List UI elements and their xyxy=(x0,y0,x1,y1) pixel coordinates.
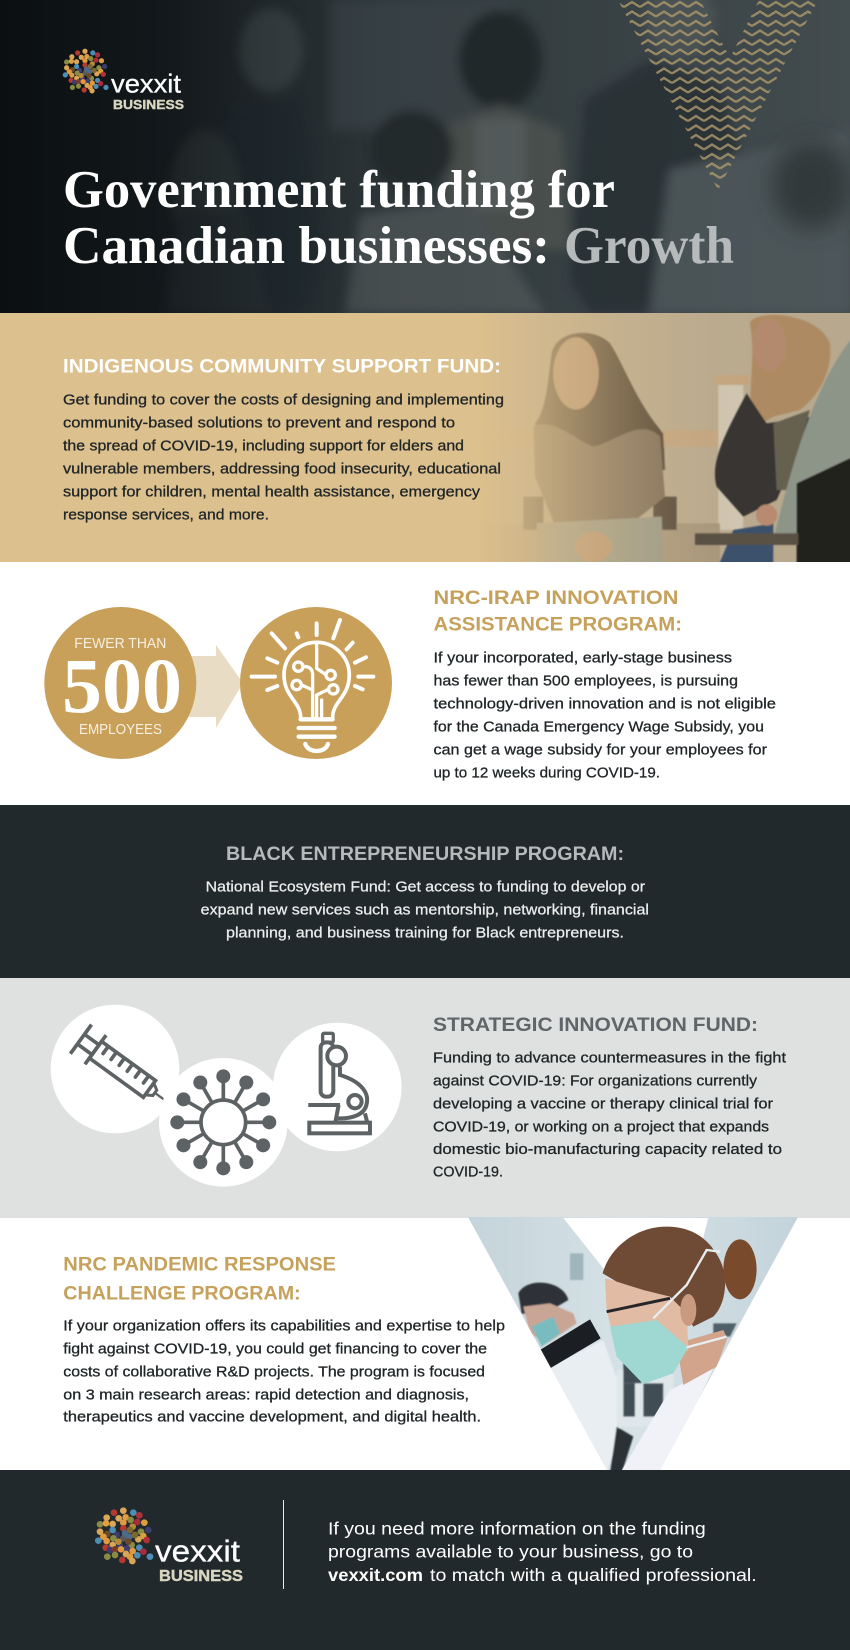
body text: costs of collaborative R&D projects. The program is focused xyxy=(63,1364,485,1381)
body text: domestic bio-manufacturing capacity related to xyxy=(433,1141,782,1158)
body text: community-based solutions to prevent and respond to xyxy=(63,414,455,431)
circle: fewer than 500 employees xyxy=(44,607,196,759)
body text: If your incorporated, early-stage business xyxy=(434,649,732,666)
call to action text: vexxit.com xyxy=(328,1565,423,1585)
call to action text: to match with a qualified professional. xyxy=(430,1565,757,1585)
circle: fewer than 500 employees: 500 xyxy=(62,642,182,729)
panel: footer xyxy=(0,1470,850,1650)
title: Growth xyxy=(564,217,734,275)
body text: COVID-19. xyxy=(433,1164,503,1181)
call to action text: If you need more information on the funding xyxy=(328,1518,706,1538)
body text: COVID-19, or working on a project that expands xyxy=(433,1118,769,1135)
panel: NRC pandemic response challenge program xyxy=(63,1217,798,1470)
heading: BLACK ENTREPRENEURSHIP PROGRAM: xyxy=(226,843,624,865)
body text: fight against COVID-19, you could get financing to cover the xyxy=(63,1341,487,1358)
logo: vexxit business xyxy=(95,1507,243,1585)
call to action text xyxy=(328,1518,757,1585)
heading: ASSISTANCE PROGRAM: xyxy=(434,614,682,636)
circle: fewer than 500 employees: FEWER THAN xyxy=(74,635,166,652)
icon circle: microscope xyxy=(273,1023,402,1151)
panel: strategic innovation fund xyxy=(0,978,850,1218)
logo: vexxit business: BUSINESS xyxy=(113,98,184,112)
arrow xyxy=(185,645,243,728)
body text xyxy=(63,1318,505,1426)
microscope eyepiece xyxy=(540,1319,601,1368)
body text xyxy=(434,649,776,781)
icon circle: syringe xyxy=(51,1005,179,1133)
logo: vexxit business xyxy=(63,49,184,112)
panel: indigenous community support fund xyxy=(0,310,850,570)
body text: technology-driven innovation and is not eligible xyxy=(434,695,776,712)
icon circle: virus xyxy=(159,1058,288,1187)
body text: National Ecosystem Fund: Get access to funding to develop or xyxy=(206,879,645,896)
body text: Get funding to cover the costs of designing and implementing xyxy=(63,391,504,408)
logo: vexxit business: vexxit xyxy=(155,1534,240,1569)
body text: vulnerable members, addressing food insecurity, educational xyxy=(63,460,501,477)
heading: NRC-IRAP INNOVATION xyxy=(434,587,678,609)
circle: fewer than 500 employees: EMPLOYEES xyxy=(79,721,162,738)
icon: light bulb with circuits xyxy=(240,607,392,759)
panel: black entrepreneurship program xyxy=(0,805,850,978)
call to action text: programs available to your business, go to xyxy=(328,1542,693,1562)
logo: vexxit business: vexxit xyxy=(111,69,182,99)
body text xyxy=(63,391,504,523)
body text: against COVID-19: For organizations currently xyxy=(433,1072,758,1089)
title: Canadian businesses: xyxy=(63,217,550,275)
body text: support for children, mental health assistance, emergency xyxy=(63,483,481,500)
photo: two women seated xyxy=(0,310,850,570)
heading: STRATEGIC INNOVATION FUND: xyxy=(433,1014,758,1036)
body text xyxy=(201,879,649,941)
panel: header xyxy=(0,0,850,313)
panel: NRC-IRAP innovation assistance program xyxy=(0,562,850,805)
logo: vexxit business: BUSINESS xyxy=(159,1568,243,1585)
heading xyxy=(434,587,682,636)
body text: expand new services such as mentorship, networking, financial xyxy=(201,901,649,918)
body text: developing a vaccine or therapy clinical trial for xyxy=(433,1095,773,1112)
heading: NRC PANDEMIC RESPONSE xyxy=(63,1254,336,1276)
body text: planning, and business training for Black entrepreneurs. xyxy=(226,924,624,941)
body text: up to 12 weeks during COVID-19. xyxy=(434,764,660,781)
heading: CHALLENGE PROGRAM: xyxy=(63,1282,301,1304)
photo: lab scientist in V shape xyxy=(460,1217,805,1473)
body text: response services, and more. xyxy=(63,506,269,523)
body text xyxy=(433,1050,787,1181)
body text: therapeutics and vaccine development, and digital health. xyxy=(63,1409,481,1426)
title: Government funding for xyxy=(63,161,615,219)
body text: Funding to advance countermeasures in the fight xyxy=(433,1050,787,1067)
body text: for the Canada Emergency Wage Subsidy, you xyxy=(434,718,764,735)
chevron V pattern xyxy=(618,0,818,190)
header photo background xyxy=(0,0,850,313)
body text: on 3 main research areas: rapid detection and diagnosis, xyxy=(63,1386,469,1403)
body text: can get a wage subsidy for your employees for xyxy=(434,741,767,758)
body text: has fewer than 500 employees, is pursuing xyxy=(434,672,738,689)
title xyxy=(63,161,734,275)
body text: the spread of COVID-19, including support for elders and xyxy=(63,437,464,454)
body text: If your organization offers its capabilities and expertise to help xyxy=(63,1318,505,1335)
heading xyxy=(63,1254,336,1304)
heading: INDIGENOUS COMMUNITY SUPPORT FUND: xyxy=(63,356,501,378)
